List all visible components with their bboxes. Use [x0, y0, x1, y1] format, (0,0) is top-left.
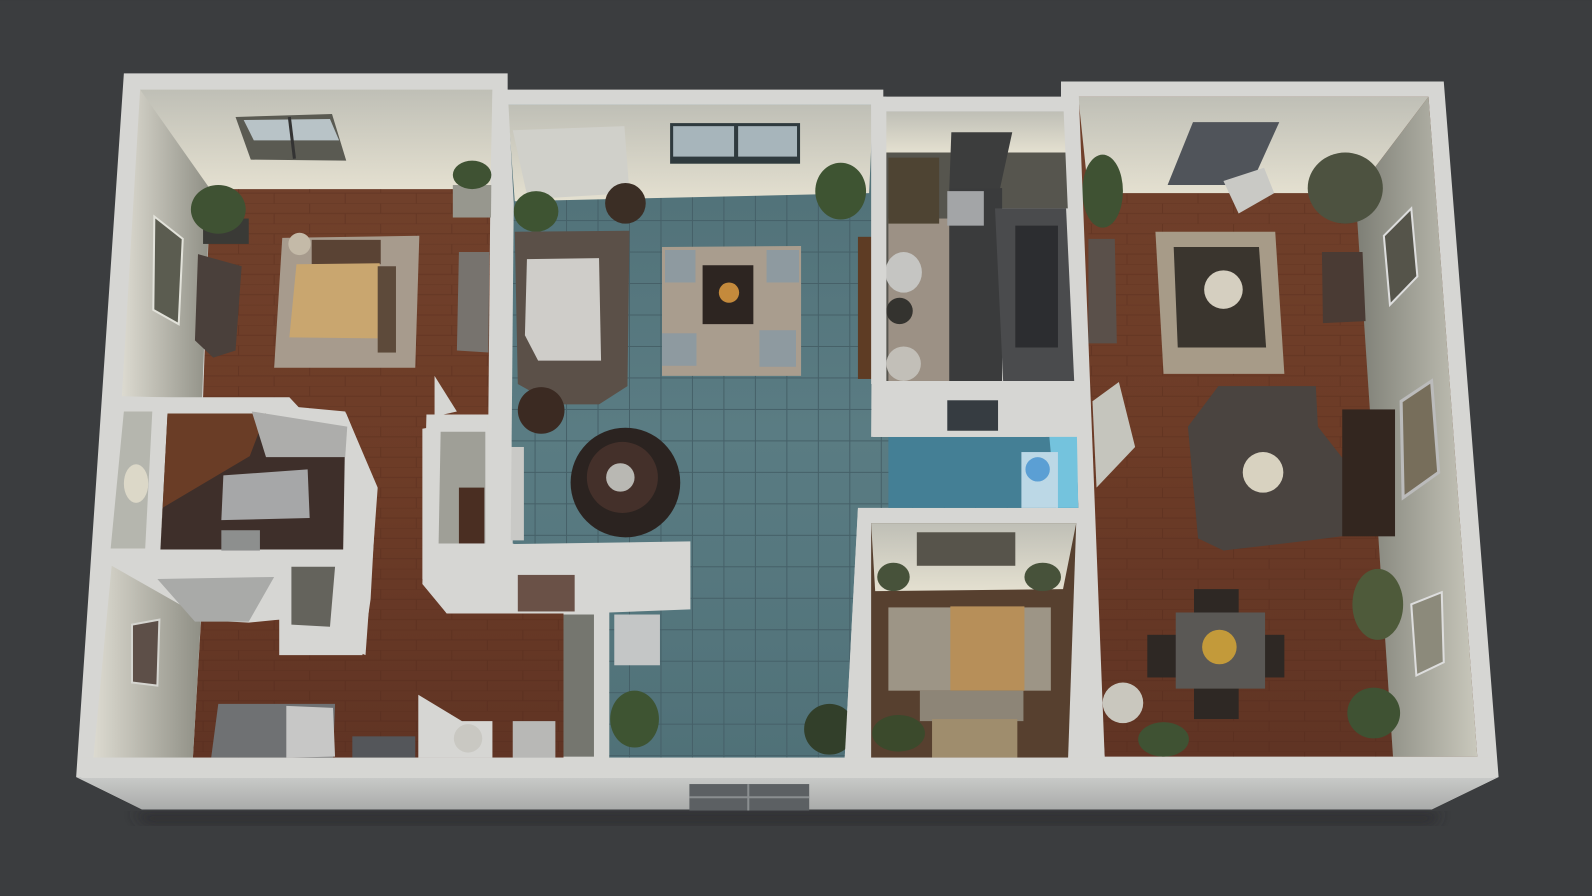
window: [670, 123, 800, 164]
closet niche: [291, 567, 335, 627]
plant: [453, 161, 491, 218]
rug: [274, 236, 419, 368]
bottom furniture: [211, 704, 335, 758]
wood floor: [193, 189, 563, 758]
rug with coffee table: [662, 246, 801, 376]
door: [1092, 382, 1135, 488]
bottom plants: [610, 691, 855, 755]
inner wall stub: [422, 541, 690, 757]
plants: [514, 163, 866, 232]
dining table: [288, 233, 396, 353]
room: right living room: [1078, 97, 1477, 757]
left wall: [122, 90, 210, 398]
round dining table: [571, 428, 680, 537]
plant: [191, 185, 249, 244]
chair: [457, 252, 489, 353]
side sofa: [1322, 252, 1366, 323]
room: kitchen: [858, 97, 1078, 437]
back wall: [508, 105, 873, 201]
bedroom floor: [160, 413, 345, 550]
interior divider walls: [487, 81, 1105, 757]
right wall: [1355, 97, 1477, 757]
rug with table: [1155, 232, 1284, 374]
front window: [689, 784, 809, 810]
plants: [1082, 153, 1403, 757]
room: bottom-left furniture: [93, 566, 555, 759]
chair: [1223, 168, 1274, 213]
window: [236, 114, 346, 161]
armchair set: [1188, 386, 1395, 551]
bed: [221, 469, 310, 520]
kitchen lower wall: [873, 384, 1074, 437]
back wall: [140, 90, 492, 189]
front exterior wall: [76, 777, 1499, 809]
bed sofa: [515, 231, 629, 404]
sofa: [195, 254, 242, 358]
room: bottom-left bedrooms wood floor: [81, 81, 1495, 778]
wardrobe: [513, 126, 629, 199]
round stool: [1103, 683, 1143, 723]
cyan lit corner: [888, 437, 1078, 508]
building outer walls: [76, 73, 1499, 810]
appliance area: [563, 615, 660, 757]
building shadow: [132, 812, 1442, 825]
left-wall bedroom block: [102, 397, 377, 655]
door closet: [422, 376, 487, 545]
bottom wall ledge: [81, 758, 1495, 778]
room: small dining room: [845, 509, 1105, 758]
cabinet niche: [418, 695, 555, 759]
left window: [153, 217, 183, 324]
room: central living room tile floor: [422, 105, 1078, 758]
windows: [1168, 122, 1444, 675]
back wall: [1078, 97, 1429, 193]
round side table: [518, 387, 565, 434]
square table: [1147, 589, 1284, 719]
